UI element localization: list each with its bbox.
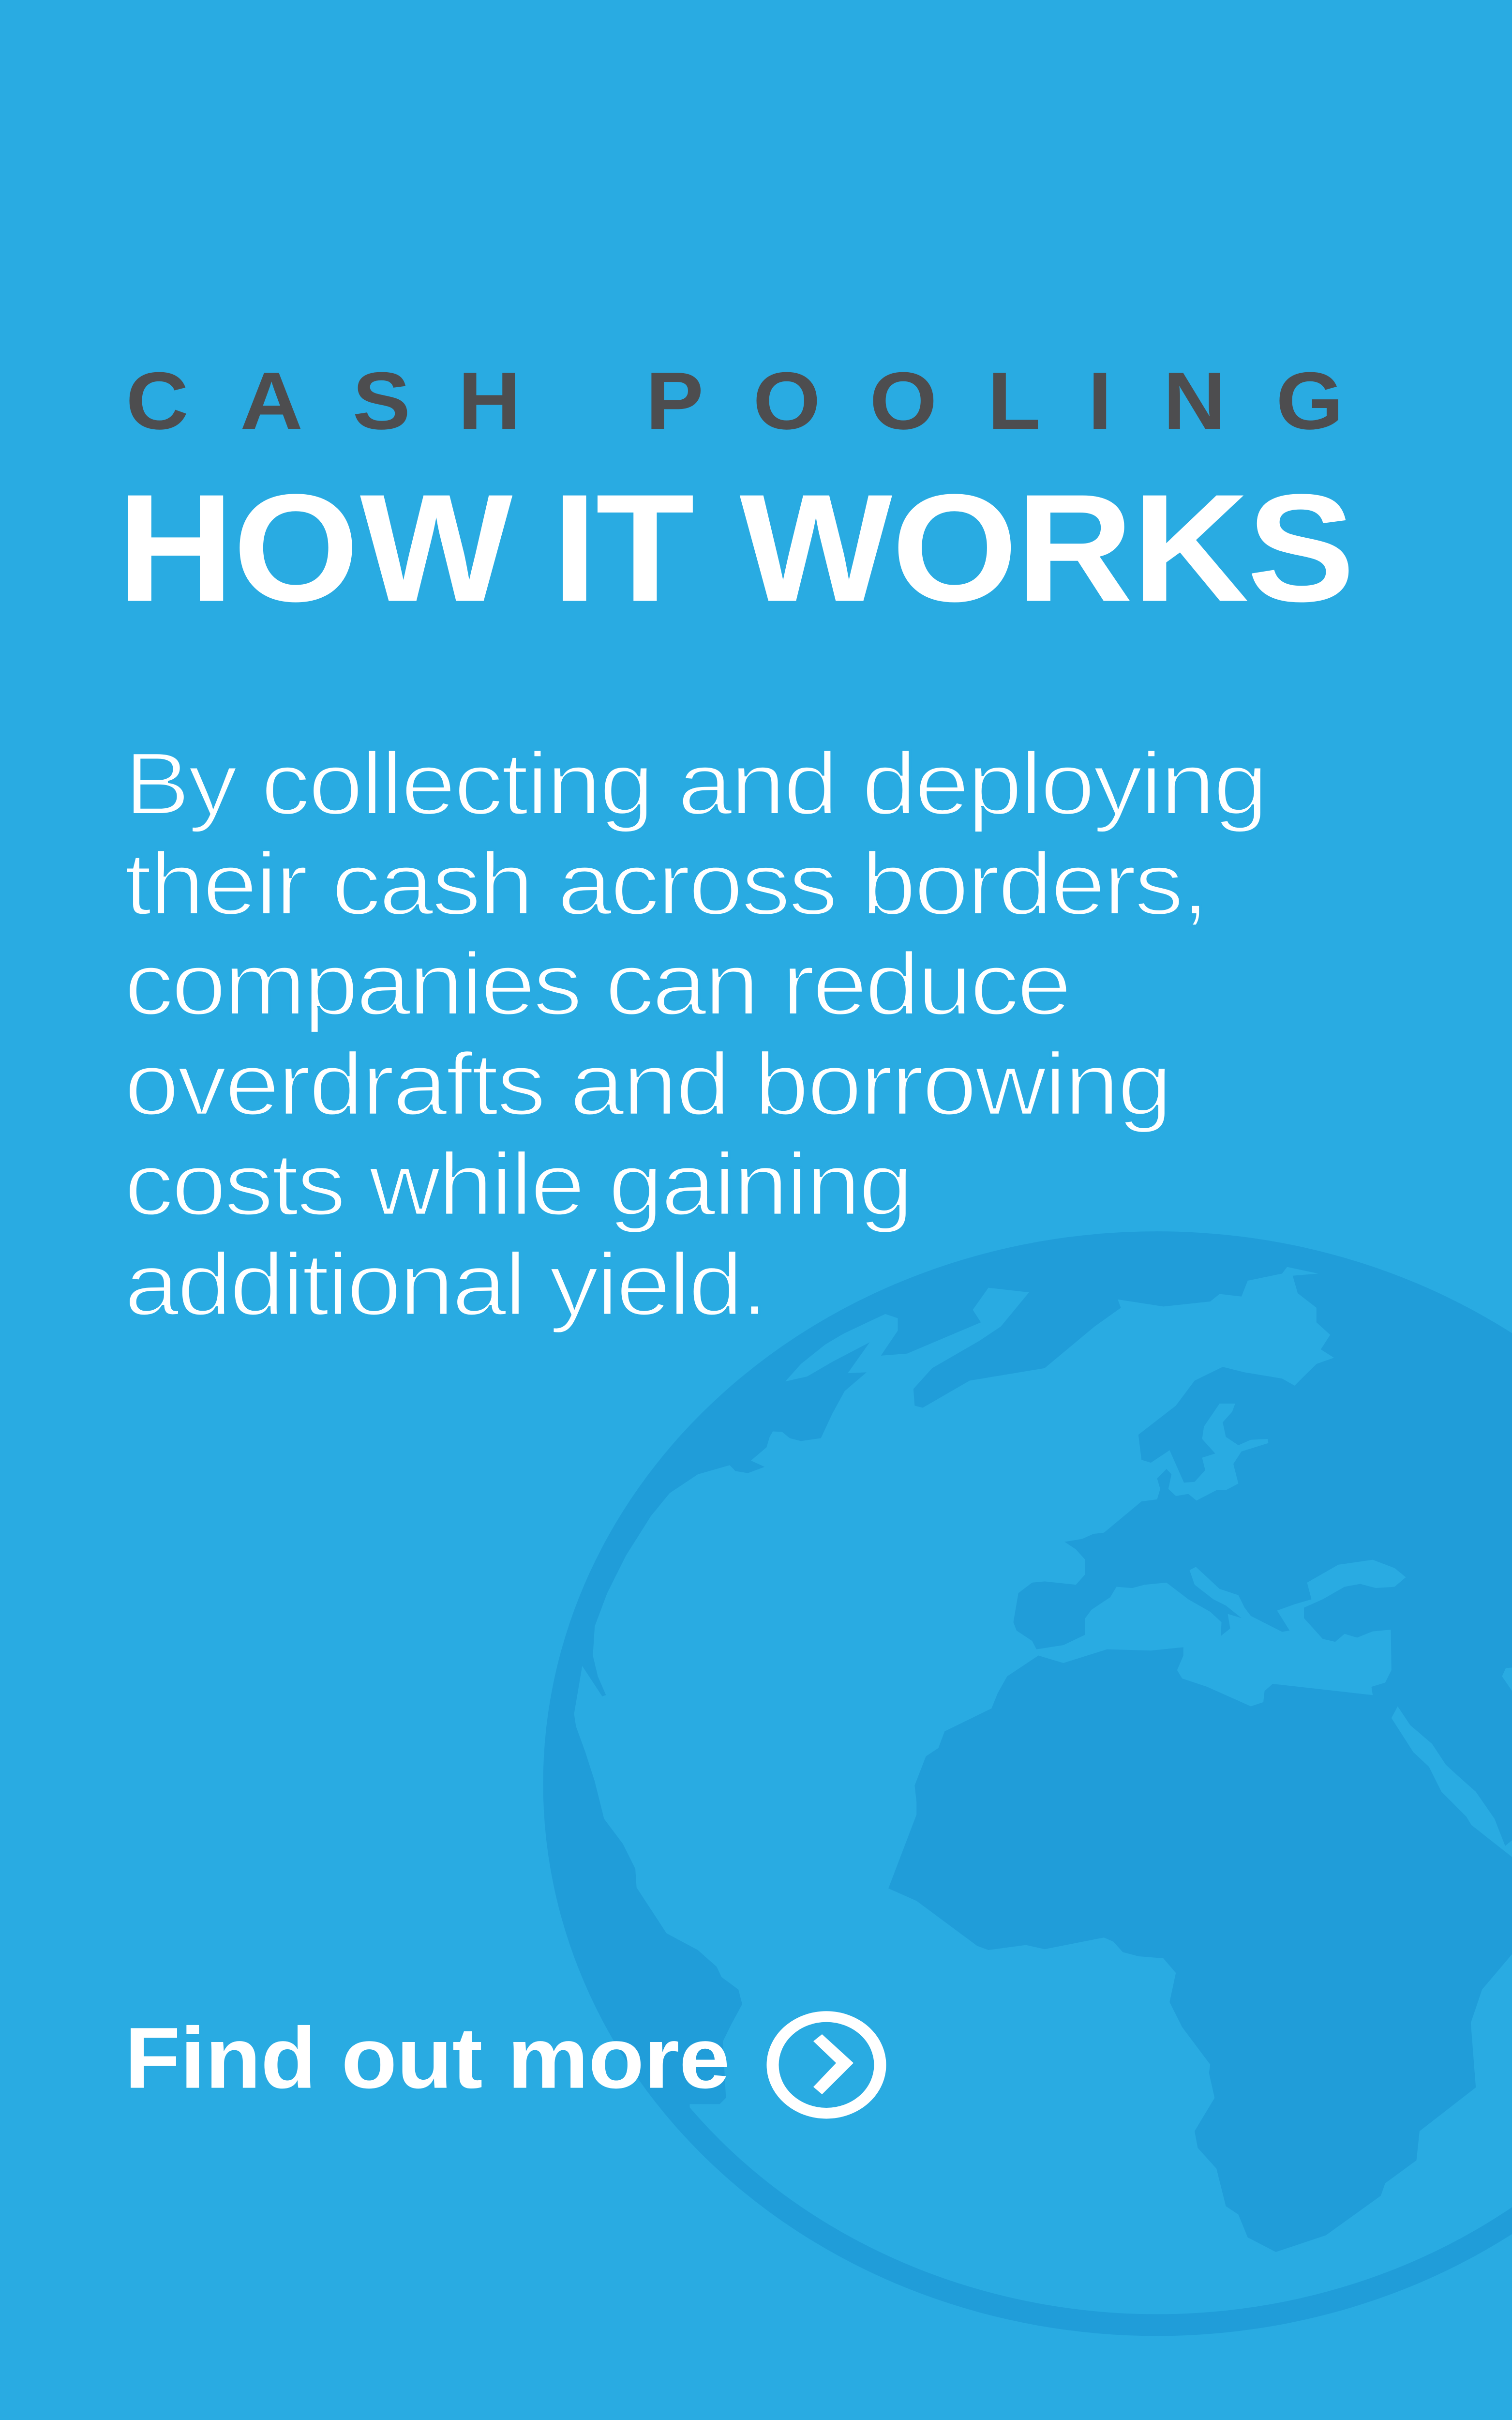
body line 6: additional yield. bbox=[124, 1235, 768, 1334]
body line 4: overdrafts and borrowing bbox=[124, 1034, 1172, 1134]
body line 2: their cash across borders, bbox=[124, 834, 1209, 934]
subtitle: cash pooling: CASH POOLING bbox=[126, 355, 1344, 446]
red sea bbox=[1392, 1707, 1512, 1860]
icon: chevron in circle bbox=[773, 2017, 880, 2113]
call to action label: Find out more bbox=[124, 2010, 730, 2106]
body paragraph bbox=[124, 734, 1268, 1334]
body line 5: costs while gaining bbox=[124, 1134, 913, 1234]
body line 3: companies can reduce bbox=[124, 935, 1072, 1034]
infographic canvas bbox=[127, 372, 1512, 2336]
body line 1: By collecting and deploying bbox=[124, 734, 1268, 833]
persian gulf bbox=[1502, 1668, 1512, 1691]
title: how it works: HOW IT WORKS bbox=[117, 463, 1355, 634]
icon: globe with continents bbox=[543, 1231, 1512, 2405]
globe land and rim bbox=[543, 1231, 1512, 2336]
call to action bbox=[124, 2010, 880, 2113]
globe oceans bbox=[574, 1267, 1512, 2405]
